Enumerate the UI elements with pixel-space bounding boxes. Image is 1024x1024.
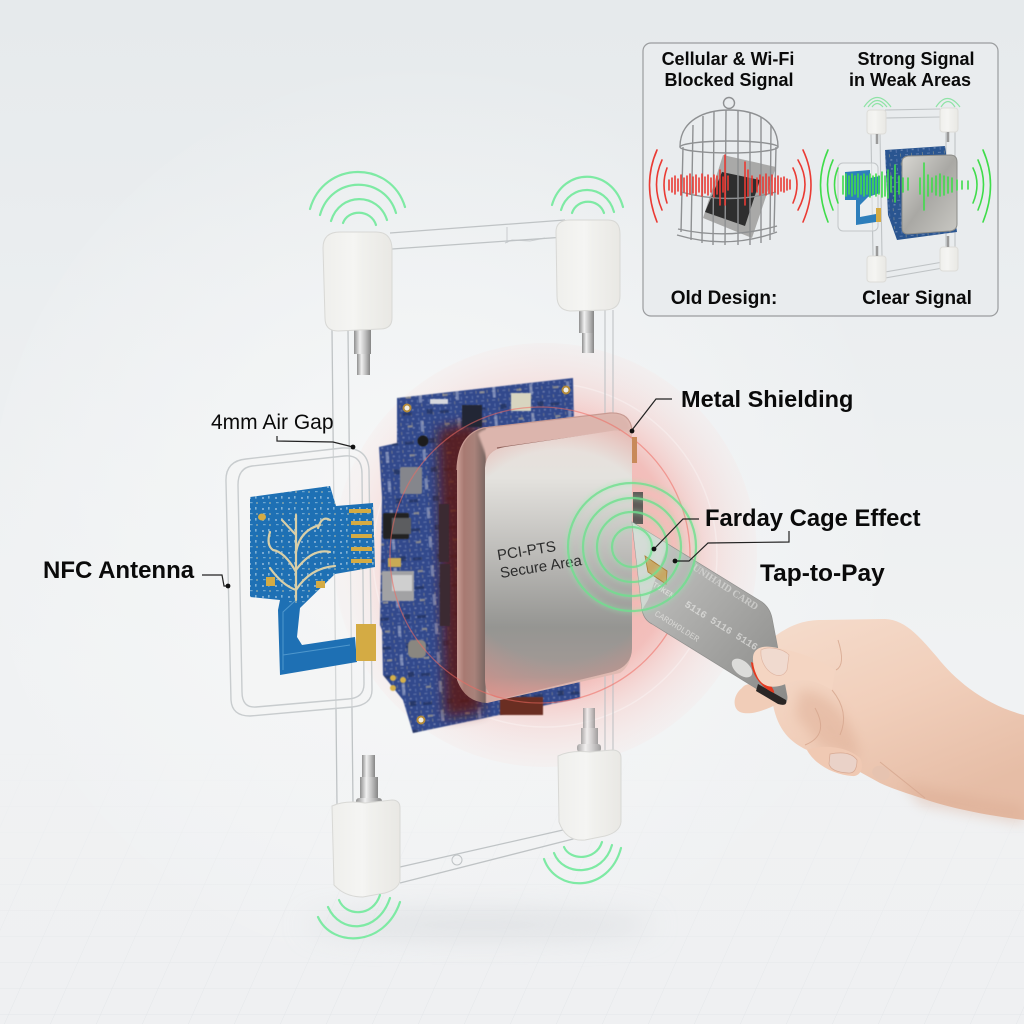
metal shielding can: [390, 407, 690, 703]
mini device waves: [864, 98, 960, 107]
hand shading and fingers: [751, 640, 1024, 825]
label: NFC antenna: [43, 557, 230, 588]
inset headings: in Weak Areas: [849, 70, 971, 90]
gold pads: [258, 509, 376, 661]
label: 4mm air gap: [211, 411, 355, 449]
shield label: PCI-PTS: [496, 538, 557, 564]
card embossed text: TOKEN: [650, 581, 676, 601]
block bottom right: [558, 750, 621, 840]
shield label: Secure Area: [499, 552, 584, 582]
shield face: [485, 431, 632, 698]
white corner blocks: [323, 220, 621, 897]
waves bottom left: [318, 895, 400, 938]
inset headings: Cellular & Wi-Fi: [662, 49, 794, 69]
icon: green clear signal: [820, 150, 990, 222]
middle finger: [807, 747, 862, 776]
main PCB board: [379, 378, 580, 733]
pcb mounting holes: [404, 386, 570, 724]
inset headings: Old Design:: [671, 288, 777, 309]
shield label: [496, 534, 584, 582]
background: [0, 902, 1024, 1024]
inset panel: old vs new design: [643, 43, 998, 316]
label: NFC antenna: NFC Antenna: [43, 557, 195, 584]
mini device blocks: [867, 108, 958, 282]
hand creases: [805, 640, 925, 798]
icon: phone in birdcage: [677, 98, 778, 245]
block top right: [556, 220, 620, 311]
pin top left: [354, 330, 371, 375]
label: metal shielding: [630, 386, 853, 433]
card chip: [645, 556, 667, 584]
red crescent: [751, 662, 774, 693]
hand body behind the card: [770, 619, 1024, 820]
middle fingernail: [829, 753, 857, 773]
payment card: [632, 522, 787, 705]
label: faraday cage effect: Farday Cage Effect: [705, 505, 921, 532]
green NFC rings: [568, 483, 696, 611]
pin bottom left: [356, 755, 382, 806]
inset headings: Strong Signal: [858, 49, 974, 69]
pin bottom right: [577, 708, 601, 752]
card embossed text: 5116 5116 5116: [682, 600, 759, 654]
transparent outer frame rails: [332, 220, 613, 883]
shield face pink edge: [485, 431, 632, 698]
label: tap-to-pay: Tap-to-Pay: [760, 560, 885, 587]
card embossed text: CARDHOLDER: [652, 609, 701, 645]
shield side connectors: [632, 437, 643, 524]
thumb nail: [761, 648, 789, 676]
shield red ring: [390, 407, 690, 703]
waves bottom right: [544, 842, 621, 883]
antenna tree traces: [269, 515, 335, 600]
card dark edge: [756, 684, 786, 705]
waves top left: [310, 172, 405, 225]
block top left: [323, 232, 392, 331]
card embossed text: UNIHAID CARD: [690, 562, 760, 613]
inset headings: [662, 49, 974, 309]
thumb: [753, 647, 835, 690]
icon: mini device: [838, 98, 960, 282]
block bottom left: [332, 800, 400, 897]
label: faraday cage effect: [652, 505, 921, 563]
card embossed text: [650, 562, 760, 654]
index finger tip: [735, 684, 778, 713]
green antenna waves: [310, 172, 623, 938]
icon: red blocked signal: [650, 150, 811, 222]
label: 4mm air gap: 4mm Air Gap: [211, 411, 334, 434]
NFC flex antenna board: [250, 486, 376, 675]
label: metal shielding: Metal Shielding: [681, 386, 853, 412]
inset headings: Blocked Signal: [664, 70, 794, 90]
pin top right: [579, 311, 594, 353]
waves top right: [552, 177, 623, 213]
pcb components: [382, 393, 543, 715]
inset headings: Clear Signal: [862, 288, 972, 309]
NFC clear panel: [226, 448, 372, 716]
red shielding glow: [333, 343, 757, 767]
ring fingernail: [870, 763, 892, 783]
palm shading: [795, 690, 860, 760]
connector pins: [354, 311, 601, 806]
dark red underglow: [438, 420, 482, 718]
